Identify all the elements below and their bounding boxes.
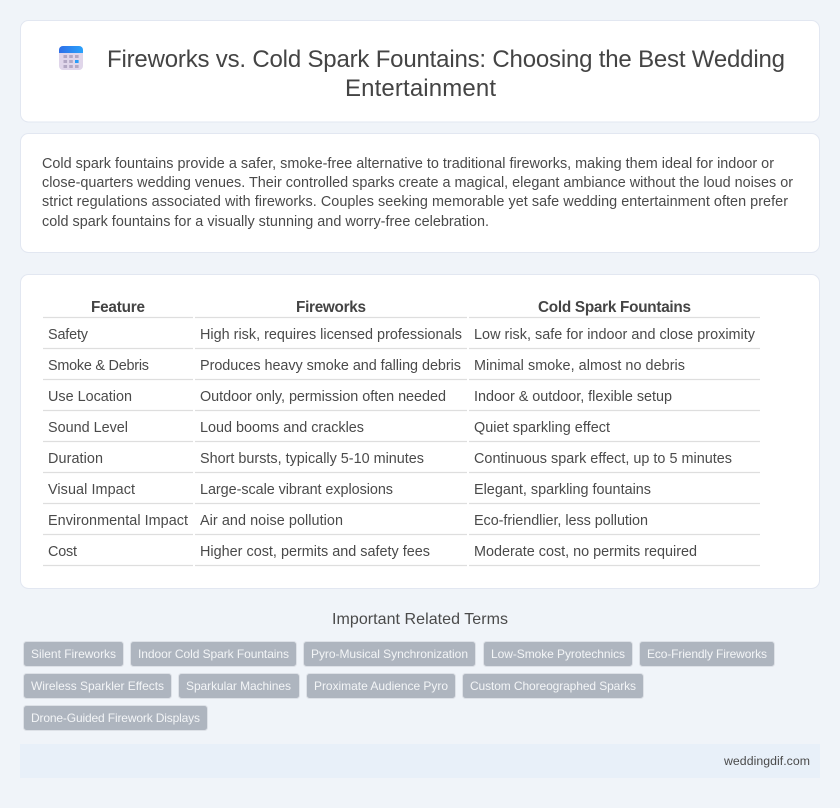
row: environmental impact: Eco-friendlier, less pollution <box>474 513 648 529</box>
row: use location <box>48 389 672 405</box>
panel: header <box>20 20 820 122</box>
row: cost: Higher cost, permits and safety fees <box>200 544 430 560</box>
footer <box>20 744 820 778</box>
title: Fireworks vs. Cold Spark Fountains: Choosing the Best Wedding <box>107 46 785 73</box>
text block: description: Cold spark fountains provide a safer, smoke-free alternative to traditional fireworks, making them ideal for indoor or <box>42 156 774 172</box>
tag <box>462 674 644 698</box>
row: visual impact: Elegant, sparkling fountains <box>474 482 651 498</box>
tags: related terms <box>24 642 774 730</box>
row: smoke and debris: Produces heavy smoke and falling debris <box>200 358 461 374</box>
row: duration: Continuous spark effect, up to 5 minutes <box>474 451 732 467</box>
table header <box>91 299 691 316</box>
title <box>107 46 785 102</box>
row: use location: Indoor & outdoor, flexible setup <box>474 389 672 405</box>
row: cost: Moderate cost, no permits required <box>474 544 697 560</box>
row: safety: Safety <box>48 327 89 343</box>
tag: Custom Choreographed Sparks <box>470 679 636 693</box>
tag <box>640 642 774 666</box>
row: duration: Short bursts, typically 5-10 minutes <box>200 451 424 467</box>
row: sound level <box>48 420 610 436</box>
row: environmental impact: Air and noise pollution <box>200 513 343 529</box>
tag <box>24 642 124 666</box>
tag: Pyro-Musical Synchronization <box>311 647 468 661</box>
row: sound level: Quiet sparkling effect <box>474 420 610 436</box>
row: visual impact: Large-scale vibrant explosions <box>200 482 393 498</box>
text block: description: close-quarters wedding venues. Their controlled sparks create a magical, elegant ambiance without the loud noises or <box>42 175 793 191</box>
table header: Fireworks <box>296 299 366 316</box>
heading: related terms: Important Related Terms <box>332 611 508 628</box>
tag: Low-Smoke Pyrotechnics <box>491 647 625 661</box>
row: use location: Outdoor only, permission often needed <box>200 389 446 405</box>
row: safety: High risk, requires licensed professionals <box>200 327 462 343</box>
tag: Sparkular Machines <box>186 679 291 693</box>
row: duration <box>48 451 732 467</box>
tag: Proximate Audience Pyro <box>314 679 448 693</box>
text block: description: strict regulations associated with fireworks. Couples seeking memorable yet safe wedding entertainment often prefer <box>42 194 788 210</box>
row: visual impact: Visual Impact <box>48 482 135 498</box>
row: environmental impact <box>48 513 648 529</box>
text block: description <box>42 156 793 230</box>
row: sound level: Loud booms and crackles <box>200 420 364 436</box>
row: cost: Cost <box>48 544 77 560</box>
row: use location: Use Location <box>48 389 132 405</box>
row: duration: Duration <box>48 451 103 467</box>
row: smoke and debris: Smoke & Debris <box>48 358 149 374</box>
panel: comparison table <box>20 274 820 588</box>
table header: Cold Spark Fountains <box>538 299 691 316</box>
row: smoke and debris: Minimal smoke, almost no debris <box>474 358 685 374</box>
table header: Feature <box>91 299 145 316</box>
tag <box>304 642 476 666</box>
icon: calendar <box>59 46 83 70</box>
row: environmental impact: Environmental Impact <box>48 513 188 529</box>
row: sound level: Sound Level <box>48 420 128 436</box>
tag: Silent Fireworks <box>31 647 116 661</box>
tag: Drone-Guided Firework Displays <box>31 711 200 725</box>
tag: Eco-Friendly Fireworks <box>647 647 767 661</box>
tag <box>306 674 456 698</box>
row: smoke and debris <box>48 358 685 374</box>
tag <box>24 674 172 698</box>
tag <box>130 642 296 666</box>
row: cost <box>48 544 697 560</box>
tag: Wireless Sparkler Effects <box>31 679 164 693</box>
tag: Indoor Cold Spark Fountains <box>138 647 289 661</box>
footer: weddingdif.com <box>723 754 810 768</box>
title: Entertainment <box>345 75 496 102</box>
row: safety: Low risk, safe for indoor and close proximity <box>474 327 756 343</box>
tag <box>178 674 300 698</box>
tag <box>484 642 632 666</box>
tag <box>24 706 208 730</box>
row: safety <box>48 327 756 343</box>
text block: description: cold spark fountains for a visually stunning and worry-free celebration. <box>42 214 489 230</box>
row: visual impact <box>48 482 651 498</box>
panel: description <box>20 134 820 252</box>
